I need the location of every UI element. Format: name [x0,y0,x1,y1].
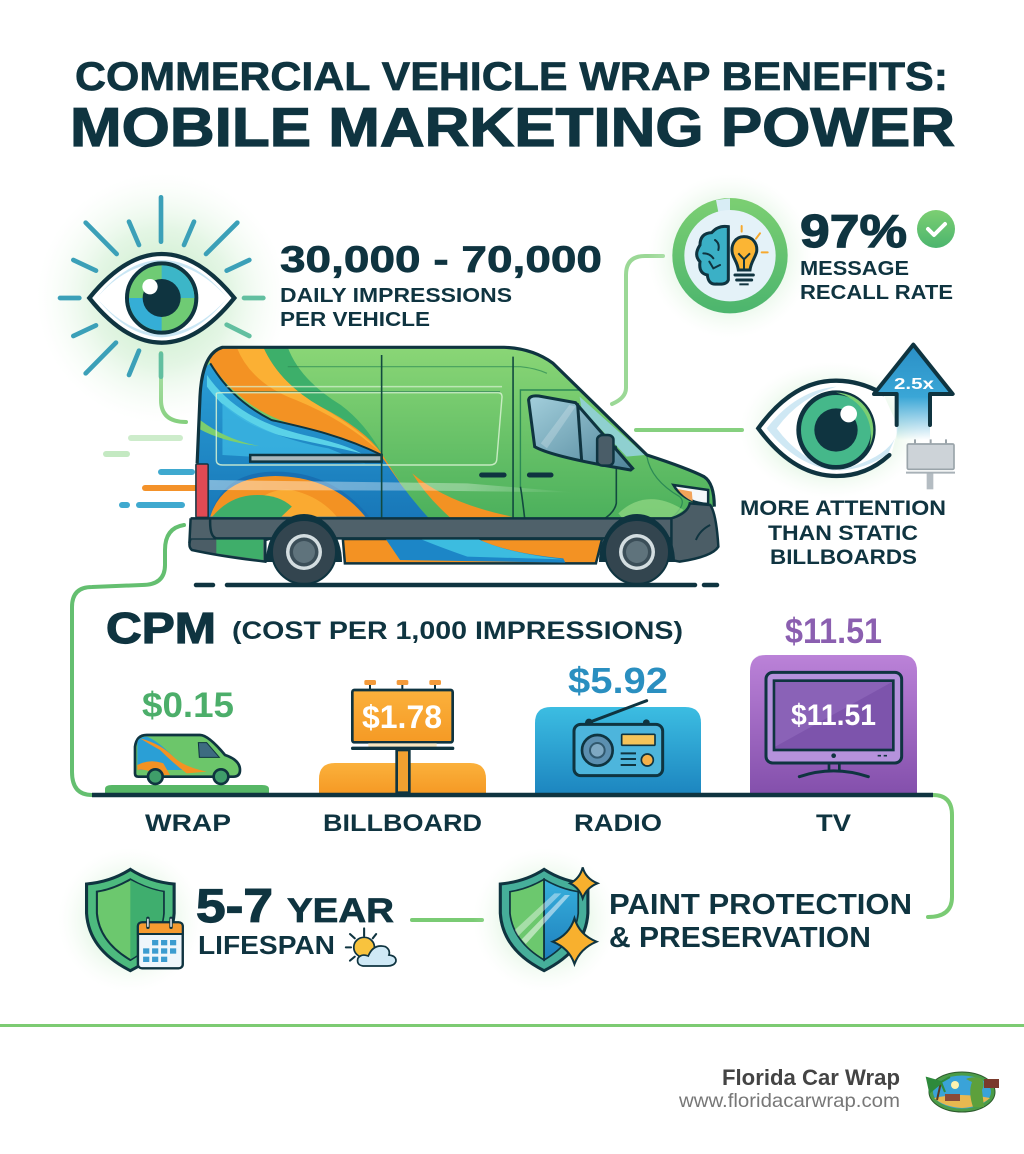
stat: lifespan: YEAR [287,892,394,930]
bar: wrap [105,686,269,837]
stat: lifespan: 5-7 [196,879,273,932]
connector lines [72,256,952,920]
stat: lifespan [196,879,394,960]
stat: daily impressions: PER VEHICLE [280,309,430,331]
icon: mini van [135,735,240,784]
title: COMMERCIAL VEHICLE WRAP BENEFITS: [75,55,948,99]
icon: brain and bulb recall ring [648,174,812,338]
bar: wrap: $0.15 [142,686,234,725]
stat: paint protection: & PRESERVATION [609,922,871,954]
heading: CPM: CPM [106,604,216,653]
stat: paint protection: PAINT PROTECTION [609,889,912,921]
stat: recall rate [800,205,953,304]
stat: daily impressions: 30,000 - 70,000 [280,239,602,280]
icon: billboard [352,680,453,793]
bar: billboard: BILLBOARD [323,810,482,837]
heading: CPM: (COST PER 1,000 IMPRESSIONS) [232,617,683,645]
icon: shield with sparkles [473,848,617,992]
bar: tv: $11.51 [785,612,882,651]
bar: tv [750,612,917,837]
icon: attention eye with 2.5x arrow and billboard [740,344,955,498]
title: MOBILE MARKETING POWER [70,96,955,158]
stat: paint protection [609,889,912,954]
icon: florida car wrap logo [927,1072,999,1112]
stat: recall rate: RECALL RATE [800,282,953,304]
stat: more attention [740,497,946,569]
bar: billboard: $1.78 [362,699,442,735]
icon: attention eye with 2.5x arrow and billboard: 2.5x [894,376,935,393]
bar: wrap: WRAP [145,810,231,837]
stat: daily impressions [280,239,602,331]
bar: tv: TV [816,810,851,837]
stat: more attention: MORE ATTENTION [740,497,946,520]
stat: daily impressions: DAILY IMPRESSIONS [280,285,512,307]
bar: radio: RADIO [574,810,662,837]
bar: radio: $5.92 [568,660,668,701]
chart baseline [92,793,933,797]
stat: recall rate: MESSAGE [800,258,909,280]
footer brand text: Florida Car Wrap [722,1065,900,1090]
footer brand text: www.floridacarwrap.com [678,1090,900,1112]
heading: CPM [106,604,683,653]
bar: tv: $11.51 [791,699,876,732]
icon: impressions eye with rays [37,173,287,423]
stat: more attention: BILLBOARDS [770,546,917,569]
icon: check badge [917,210,955,248]
speed lines [106,438,196,505]
wrapped van [189,347,718,585]
icon: shield with calendar [58,848,202,992]
title [70,55,955,158]
icon: sun and cloud [346,928,396,966]
footer divider [0,1024,1024,1027]
stat: more attention: THAN STATIC [768,522,918,545]
bar: billboard [319,680,486,837]
footer brand text [678,1065,900,1112]
icon: radio [574,701,663,776]
stat: lifespan: LIFESPAN [198,930,335,960]
bar: radio [535,660,701,837]
icon: tv [766,672,902,777]
stat: recall rate: 97% [800,205,907,257]
